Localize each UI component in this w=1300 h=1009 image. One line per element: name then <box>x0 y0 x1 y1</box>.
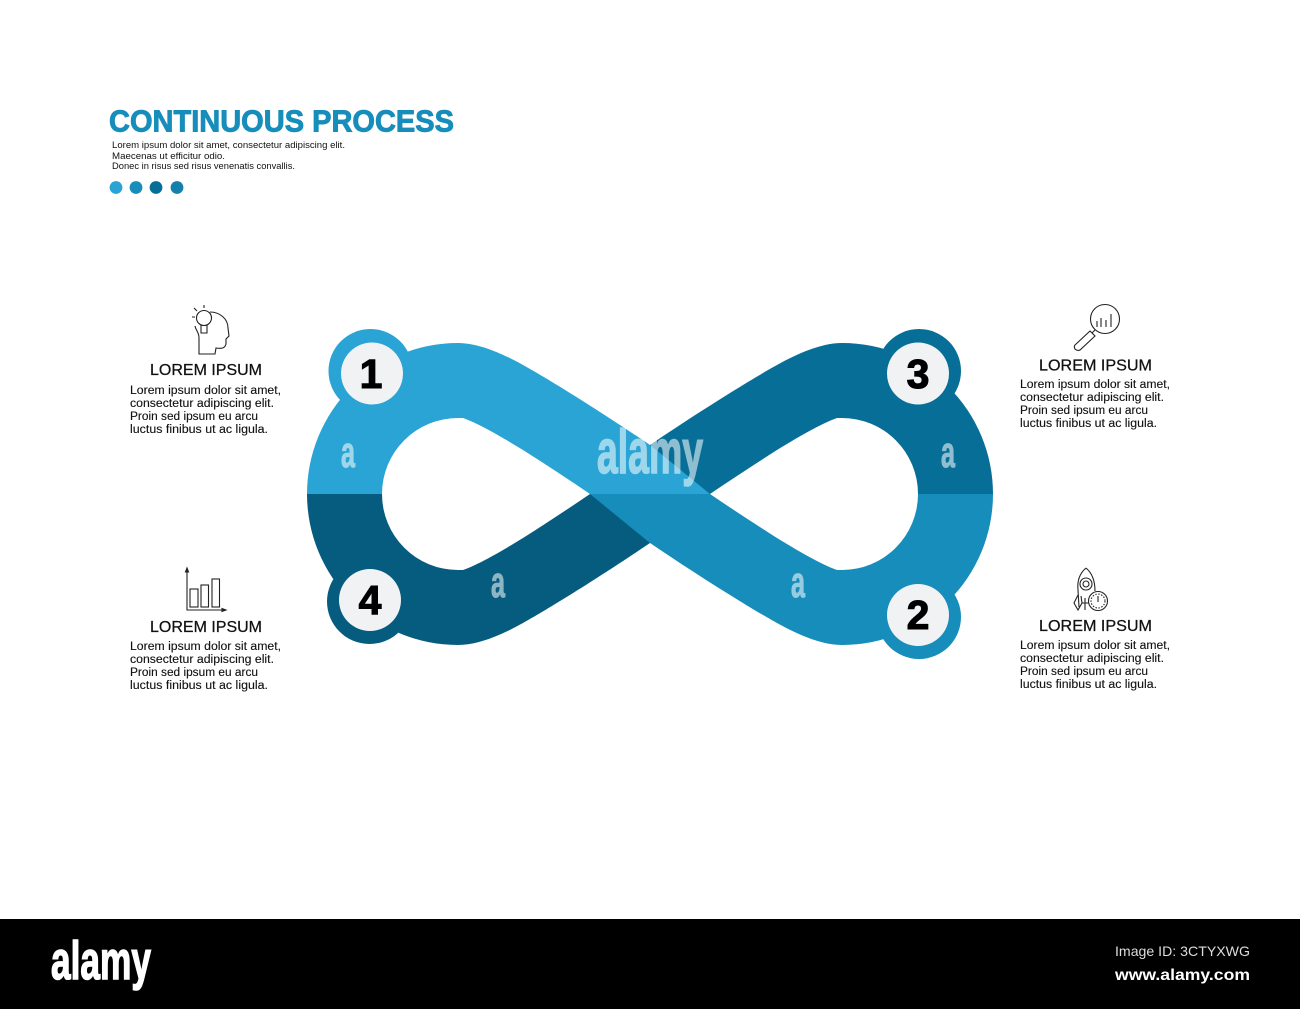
heading: LOREM IPSUM <box>1039 358 1152 374</box>
header description: Lorem ipsum dolor sit amet, consectetur adipiscing elit. <box>112 140 345 150</box>
body text: Lorem ipsum dolor sit amet, <box>130 385 281 397</box>
header description: Donec in risus sed risus venenatis convallis. <box>112 161 295 171</box>
title: CONTINUOUS PROCESS <box>109 104 454 138</box>
panel: step 2 <box>1020 568 1170 691</box>
watermark: a <box>341 428 355 477</box>
body text <box>130 385 281 436</box>
body text: Proin sed ipsum eu arcu <box>1020 405 1148 417</box>
panel: step 4 <box>130 568 281 692</box>
body text: consectetur adipiscing elit. <box>130 654 274 666</box>
body text <box>130 641 281 692</box>
badge 2: 2 <box>907 592 929 638</box>
panel: step 1 <box>130 305 281 436</box>
segment 1: upper left light band <box>307 343 710 494</box>
body text: Proin sed ipsum eu arcu <box>130 667 258 679</box>
icon: head with light bulb <box>192 305 229 354</box>
watermark: alamy <box>597 418 703 487</box>
segment 4: lower left darkest band <box>307 494 710 645</box>
heading: LOREM IPSUM <box>150 619 262 636</box>
body text: Proin sed ipsum eu arcu <box>130 411 258 423</box>
segment 3: upper right dark band <box>590 343 993 494</box>
body text: consectetur adipiscing elit. <box>130 398 274 410</box>
body text: Proin sed ipsum eu arcu <box>1020 666 1148 678</box>
body text: luctus finibus ut ac ligula. <box>1020 679 1157 691</box>
header block <box>109 104 454 194</box>
segment 2: lower right mid band <box>590 494 993 645</box>
badge 1 <box>328 329 412 413</box>
four colour dots <box>110 181 183 194</box>
body text: Lorem ipsum dolor sit amet, <box>1020 379 1170 391</box>
body text: consectetur adipiscing elit. <box>1020 392 1164 404</box>
watermark <box>341 418 955 607</box>
watermark: a <box>491 558 505 607</box>
heading: LOREM IPSUM <box>150 362 262 379</box>
body text: luctus finibus ut ac ligula. <box>130 424 268 436</box>
infinity loop diagram <box>307 329 993 659</box>
footer bar <box>0 919 1300 1009</box>
website: www.alamy.com <box>1114 967 1250 984</box>
header description <box>112 140 345 171</box>
watermark: a <box>791 558 805 607</box>
body text: luctus finibus ut ac ligula. <box>130 680 268 692</box>
image id: Image ID: 3CTYXWG <box>1115 943 1250 959</box>
badge 4 <box>327 559 412 644</box>
body text: Lorem ipsum dolor sit amet, <box>1020 640 1170 652</box>
body text <box>1020 379 1170 430</box>
body text: luctus finibus ut ac ligula. <box>1020 418 1157 430</box>
badge 2 <box>877 575 961 659</box>
icon: magnifier with chart <box>1074 304 1120 350</box>
icon: bar chart <box>186 568 226 612</box>
footer logo: alamy <box>51 931 151 991</box>
badge 3 <box>877 329 961 413</box>
header description: Maecenas ut efficitur odio. <box>112 151 225 161</box>
badge 4: 4 <box>359 577 382 623</box>
watermark: a <box>941 428 955 477</box>
panel: step 3 <box>1020 304 1170 430</box>
badge 1: 1 <box>360 351 382 397</box>
icon: rocket with clock <box>1074 568 1108 610</box>
badge 3: 3 <box>907 351 929 397</box>
heading: LOREM IPSUM <box>1039 618 1152 635</box>
body text: Lorem ipsum dolor sit amet, <box>130 641 281 653</box>
body text <box>1020 640 1170 691</box>
body text: consectetur adipiscing elit. <box>1020 653 1164 665</box>
